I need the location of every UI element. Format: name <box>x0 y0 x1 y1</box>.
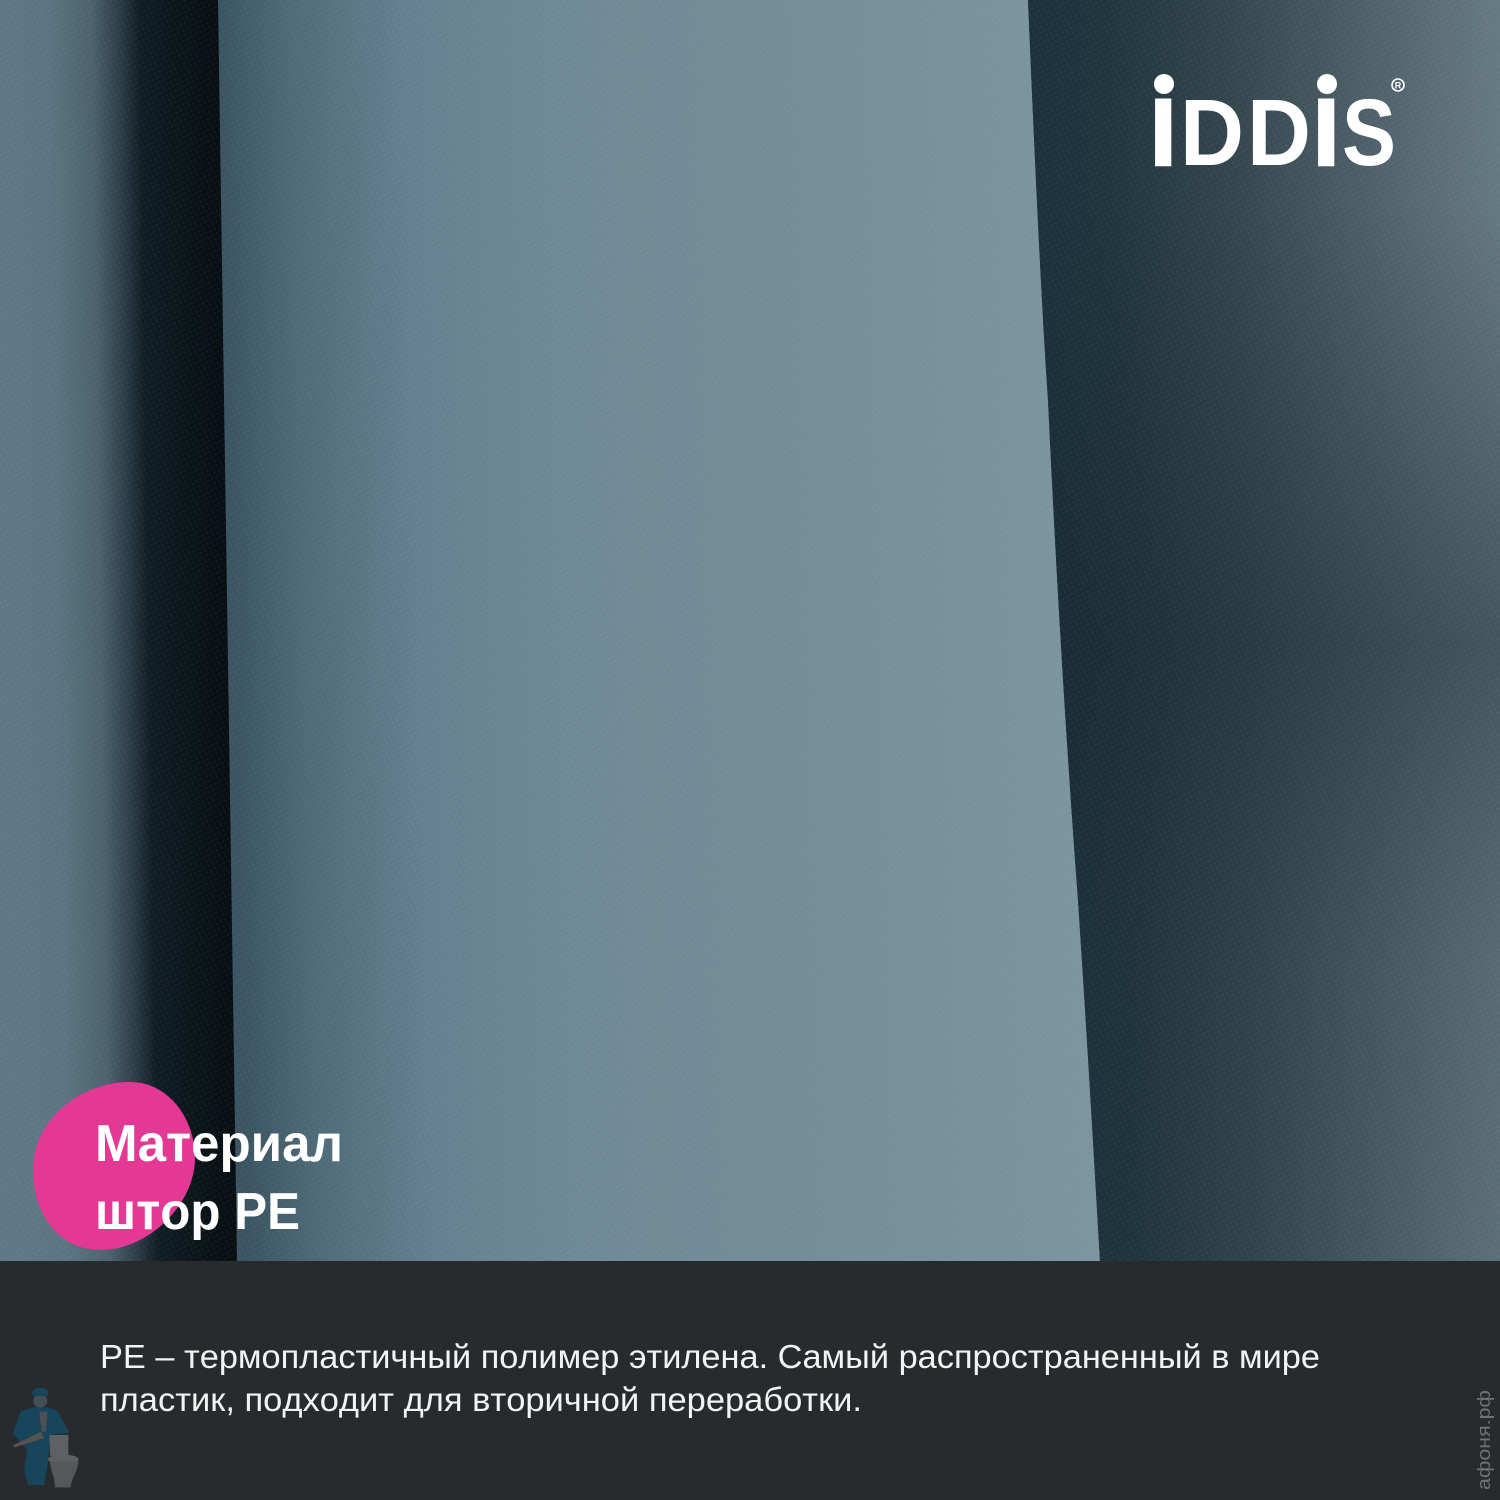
title: штор PE <box>95 1183 300 1241</box>
decorative pink blob <box>33 1082 195 1250</box>
logo: IDDIS: S <box>1342 80 1396 186</box>
logo: IDDIS: I <box>1150 80 1176 186</box>
logo: IDDIS: D <box>1180 80 1244 186</box>
title: Материал <box>95 1115 343 1173</box>
description text <box>100 1338 1320 1418</box>
description text: пластик, подходит для вторичной переработки. <box>100 1381 862 1418</box>
panel: central fabric fold <box>218 0 1100 1261</box>
title <box>95 1115 343 1241</box>
logo: IDDIS: I <box>1313 80 1339 186</box>
logo: IDDIS: D <box>1247 80 1311 186</box>
watermark: afonya.rf: афоня.рф <box>1474 1390 1494 1490</box>
description text: PE – термопластичный полимер этилена. Самый распространенный в мире <box>100 1338 1320 1375</box>
logo: IDDIS: R <box>1395 80 1402 90</box>
logo: IDDIS <box>1150 74 1404 186</box>
panel: dark description footer <box>0 1261 1500 1500</box>
icon: plumber with toilet <box>13 1388 79 1487</box>
